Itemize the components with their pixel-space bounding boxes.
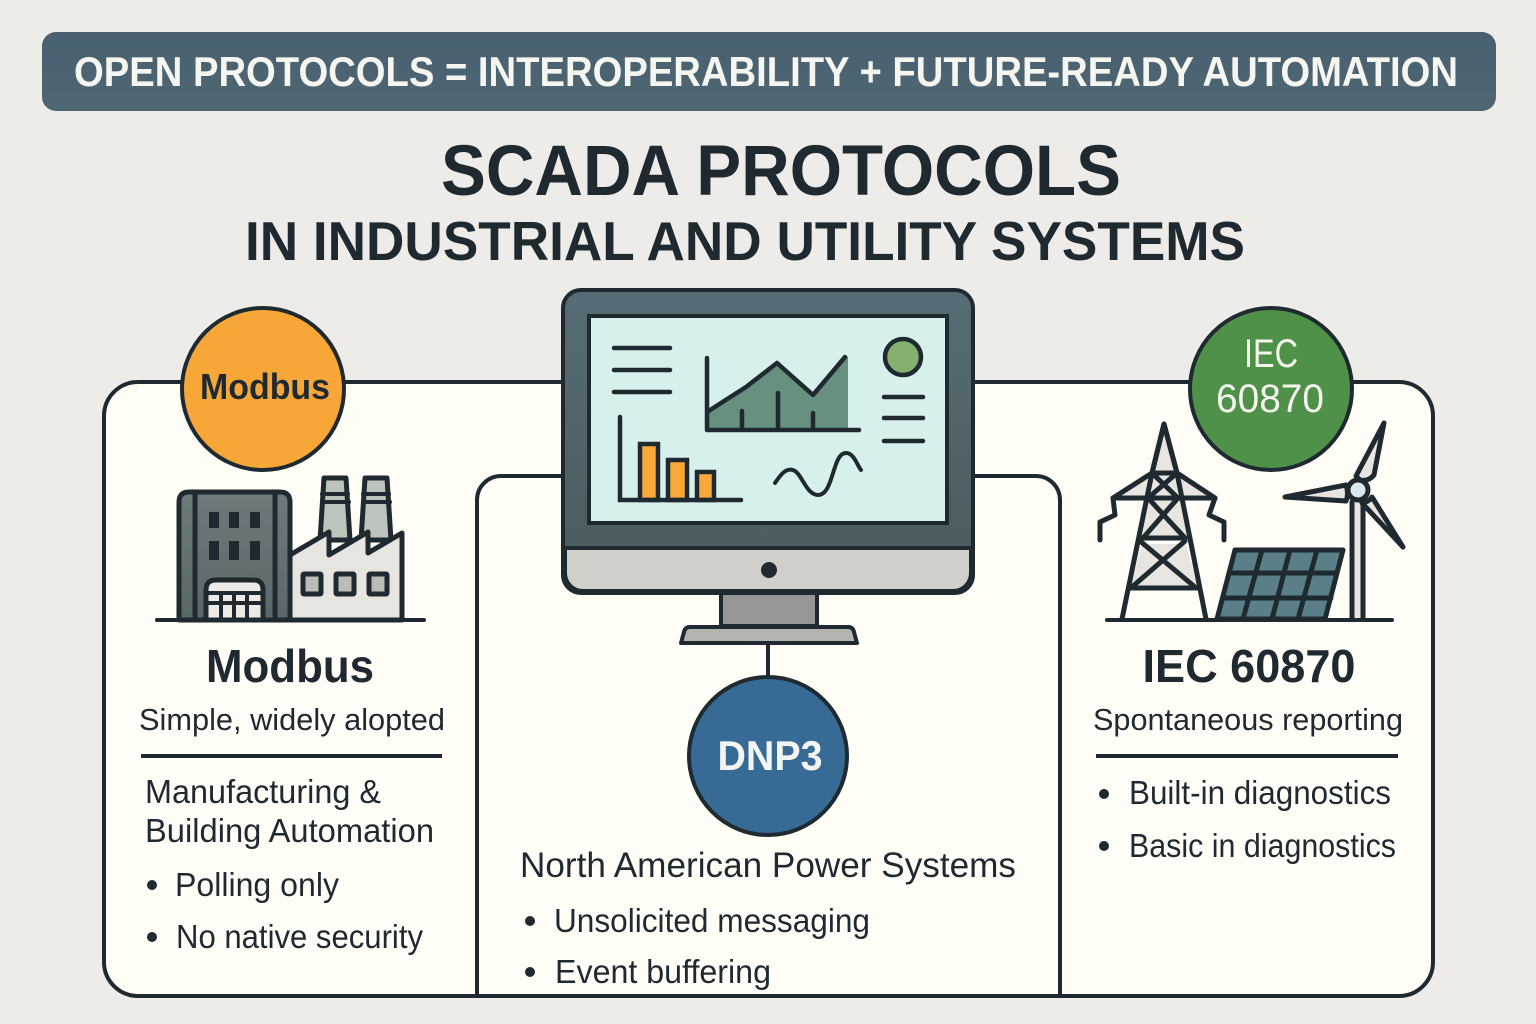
text block: DNP3: Unsolicited messaging — [554, 902, 870, 939]
badge: IEC 60870: 60870 — [1216, 377, 1324, 421]
badge: IEC 60870 — [1190, 308, 1352, 470]
text block: Modbus — [139, 640, 445, 955]
badge: DNP3 — [689, 677, 847, 835]
text block: Modbus: No native security — [176, 918, 423, 955]
badge: IEC 60870: IEC — [1244, 332, 1298, 376]
text block: DNP3: North American Power Systems — [520, 846, 1016, 885]
icon: SCADA monitor — [563, 290, 973, 643]
connector: monitor to DNP3 — [766, 643, 770, 680]
badge: Modbus — [182, 308, 344, 470]
text block: IEC 60870: Basic in diagnostics — [1129, 827, 1396, 864]
text block: IEC 60870: Built-in diagnostics — [1129, 774, 1391, 811]
badge: Modbus: Modbus — [200, 366, 330, 407]
badge: DNP3: DNP3 — [718, 732, 822, 779]
title: SCADA PROTOCOLS — [441, 132, 1121, 211]
panel: outer card — [104, 382, 1433, 996]
text block: Modbus: Manufacturing & — [145, 773, 381, 810]
text block: Modbus: Modbus — [206, 640, 374, 692]
panel: DNP3 centre card — [477, 476, 1060, 996]
text block: Modbus: Simple, widely alopted — [139, 702, 445, 737]
icon: factory building — [157, 478, 424, 620]
subtitle: IN INDUSTRIAL AND UTILITY SYSTEMS — [245, 210, 1245, 272]
text block: IEC 60870 — [1093, 640, 1403, 864]
text block: IEC 60870: Spontaneous reporting — [1093, 702, 1403, 737]
text block: DNP3 — [520, 846, 1016, 990]
top banner — [42, 32, 1496, 111]
text block: DNP3: Event buffering — [555, 953, 771, 990]
icon: pylon, solar panel and wind turbine — [1100, 423, 1403, 620]
text block: Modbus: Building Automation — [145, 812, 434, 849]
text block: Modbus: Polling only — [175, 866, 339, 903]
text block: IEC 60870: IEC 60870 — [1142, 640, 1356, 692]
